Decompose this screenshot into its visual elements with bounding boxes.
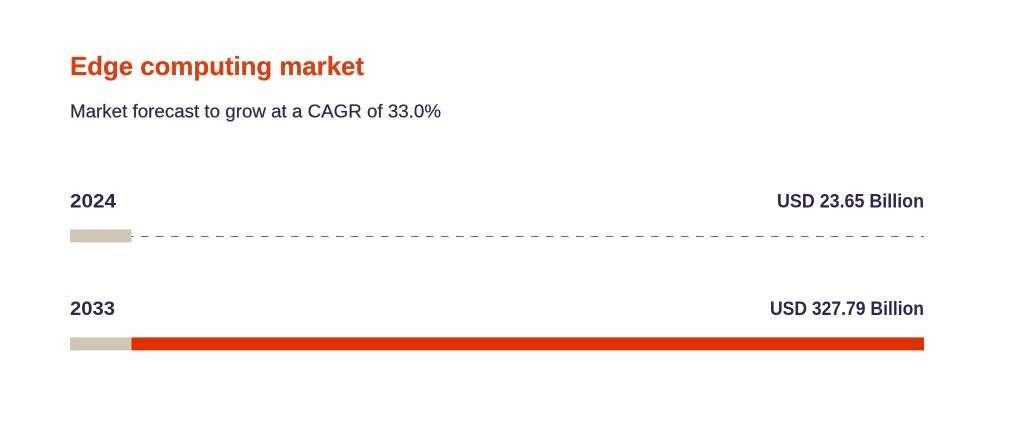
row: 2033 (70, 298, 924, 350)
value label 2024: USD 23.65 Billion (777, 190, 924, 212)
value label 2033: USD 327.79 Billion (770, 298, 924, 320)
dashed remainder line (126, 236, 924, 238)
bar: 2033 base (70, 337, 132, 350)
year label 2024: 2024 (70, 190, 116, 212)
bar: 2033 growth (132, 337, 924, 350)
row: 2024 (70, 190, 924, 242)
bar: 2024 base (70, 229, 132, 242)
title: Edge computing market (70, 51, 364, 81)
year label 2033: 2033 (70, 298, 115, 320)
subtitle: Market forecast to grow at a CAGR of 33.0% (70, 100, 441, 122)
